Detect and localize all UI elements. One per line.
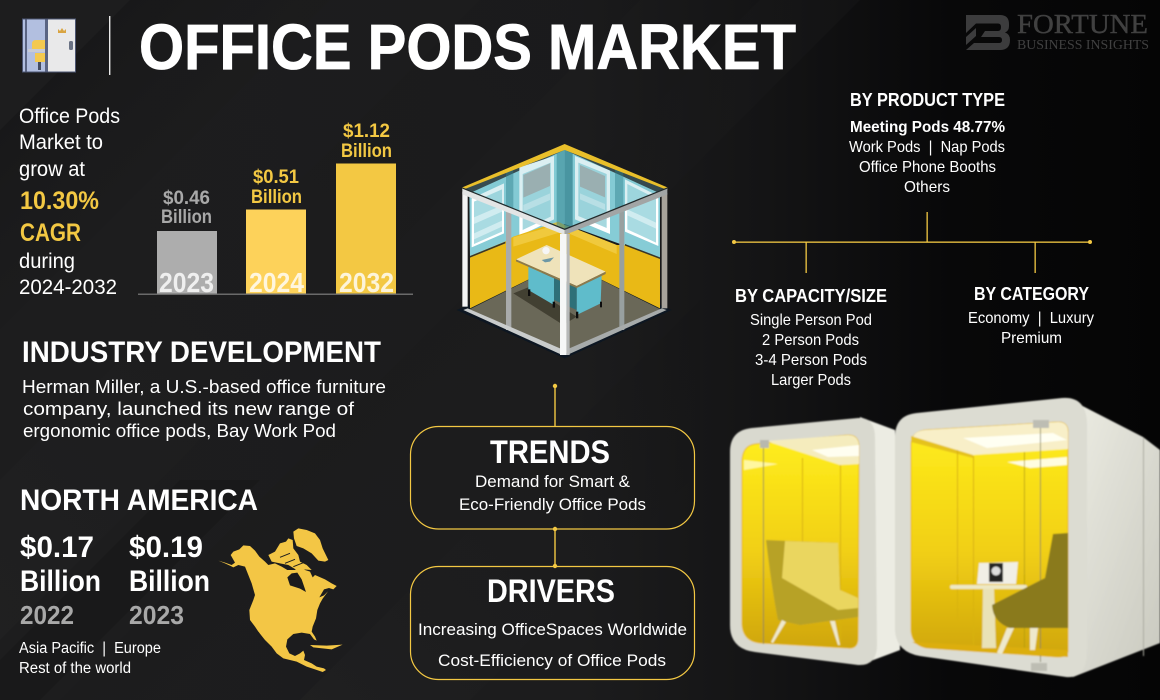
logo: Fortune Business Insights: BUSINESS INSIGHTS [1017, 38, 1149, 53]
panel: by product type [849, 90, 1005, 196]
text block: CAGR statement: Market to [19, 131, 103, 154]
desk [516, 245, 606, 318]
panel: by product type: Others [904, 179, 950, 196]
bar chart: market size: Billion [161, 207, 212, 228]
panel: North America [19, 484, 343, 677]
stat: 2023 value [129, 531, 210, 630]
text block: industry development: ergonomic office pods, Bay Work Pod [23, 421, 336, 441]
other regions: Asia Pacific | Europe [19, 640, 161, 657]
text block: CAGR statement: during [19, 250, 75, 273]
panel: by category: Economy | Luxury [968, 310, 1094, 327]
right pod [895, 398, 1160, 677]
panel: by product type: Office Phone Booths [859, 159, 996, 176]
stat: 2023 value: Billion [129, 565, 210, 598]
illustration: isometric glass pod [457, 144, 672, 358]
bar chart: market size: 2023 [159, 267, 214, 298]
panel: by product type: Meeting Pods 48.77% [850, 119, 1005, 136]
glass tint over the roof [462, 145, 667, 230]
other regions: Rest of the world [19, 660, 131, 677]
panel: trends: Eco-Friendly Office Pods [459, 495, 646, 514]
bar chart: market size: $0.46 [163, 188, 210, 209]
other regions [19, 640, 161, 677]
icon: office pod [22, 19, 76, 72]
back wall windows [472, 156, 658, 247]
photo: yellow office pods [730, 398, 1160, 677]
bar chart: market size [138, 121, 413, 298]
armchair [992, 533, 1068, 654]
panel: trends: Demand for Smart & [475, 472, 631, 491]
tree connector [732, 212, 1092, 273]
panel: by product type: Work Pods | Nap Pods [849, 139, 1005, 156]
stat: 2022 value [20, 531, 101, 630]
panel: by product type: BY PRODUCT TYPE [850, 90, 1005, 110]
stat: 2022 value: Billion [20, 565, 101, 598]
heading: industry development: INDUSTRY DEVELOPMENT [22, 336, 381, 369]
divider [109, 16, 110, 75]
bar chart: market size: $0.51 [253, 167, 299, 188]
bar chart: market size: Billion [341, 141, 392, 162]
text block: CAGR statement: grow at [19, 158, 85, 181]
bar chart: market size: 2024 [249, 267, 304, 298]
panel: by capacity/size: Larger Pods [771, 372, 851, 389]
text block: CAGR statement: 2024-2032 [19, 276, 117, 299]
text block: CAGR statement: 10.30% [20, 187, 99, 215]
frame [462, 187, 667, 355]
panel: by category [968, 284, 1094, 347]
stat: 2022 value: 2022 [20, 600, 74, 630]
panel: trends: TRENDS [490, 434, 610, 470]
stat: 2023 value: 2023 [129, 600, 184, 630]
text block: CAGR statement: CAGR [20, 219, 81, 247]
panel: drivers: DRIVERS [487, 573, 615, 609]
panel: by capacity/size [735, 286, 887, 389]
bar chart: market size: $1.12 [343, 121, 390, 142]
yellow rim [462, 144, 667, 190]
text block: CAGR statement: Office Pods [19, 105, 120, 128]
connector: trends to drivers [553, 527, 557, 568]
map: North America [218, 528, 343, 672]
text block: industry development: Herman Miller, a U.S.-based office furniture [22, 377, 386, 397]
left pod [730, 417, 900, 665]
table and laptop [950, 562, 1027, 648]
panel: by capacity/size: 2 Person Pods [762, 332, 859, 349]
logo: Fortune Business Insights: FORTUNE [1017, 9, 1148, 39]
panel: drivers [410, 566, 694, 680]
stat: 2022 value: $0.17 [20, 531, 94, 564]
yellow lower walls [470, 222, 565, 308]
text block: industry development [22, 377, 386, 441]
connector: top dot to trends [553, 384, 557, 426]
panel: by capacity/size: Single Person Pod [750, 312, 872, 329]
panel: drivers: Cost-Efficiency of Office Pods [438, 651, 666, 670]
title: OFFICE PODS MARKET [139, 11, 796, 83]
heading: North America: NORTH AMERICA [20, 484, 258, 517]
text block: CAGR statement [19, 105, 120, 299]
panel: trends [410, 426, 694, 529]
panel: by category: BY CATEGORY [974, 284, 1089, 304]
bar chart: market size: Billion [251, 187, 302, 208]
stat: 2023 value: $0.19 [129, 531, 203, 564]
text block: industry development: company, launched its new range of [23, 399, 355, 419]
panel: by category: Premium [1001, 330, 1062, 347]
panel: drivers: Increasing OfficeSpaces Worldwide [418, 620, 687, 639]
panel: by capacity/size: 3-4 Person Pods [755, 352, 867, 369]
bar chart: market size: 2032 [339, 267, 394, 298]
logo: Fortune Business Insights [966, 9, 1149, 53]
panel: by capacity/size: BY CAPACITY/SIZE [735, 286, 887, 306]
